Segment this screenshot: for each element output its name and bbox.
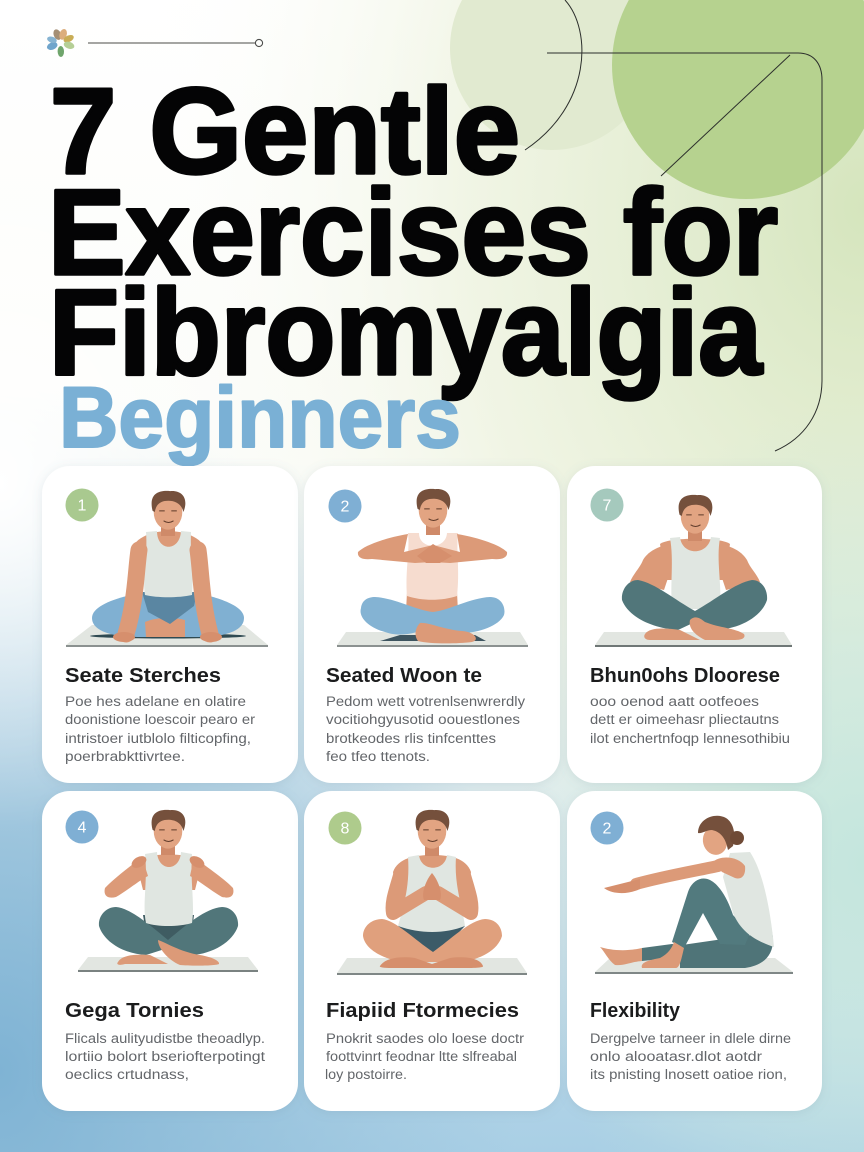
- description: [325, 1031, 525, 1082]
- subtitle: Beginners: Beginners: [59, 370, 461, 466]
- heading: Flexibility: [590, 999, 681, 1022]
- heading: Seate Sterches: [65, 664, 221, 687]
- title: Fibromyalgia: [49, 264, 763, 400]
- description: its pnisting lnosett oatioe rion,: [590, 1067, 787, 1082]
- title: 7 Gentle: [50, 63, 520, 199]
- number badge 2: 2: [341, 498, 350, 516]
- description: oeclics crtudnass,: [65, 1067, 189, 1082]
- illustration: seated stretch: [66, 491, 268, 647]
- description: Flicals aulityudistbe theoadlyp.: [65, 1031, 265, 1046]
- description: [590, 694, 790, 746]
- number badge 4: [66, 810, 98, 844]
- illustration: shoulder rolls: [595, 495, 792, 647]
- number badge 1: [66, 488, 98, 522]
- description: ooo oenod aatt ootfeoes: [590, 694, 759, 709]
- description: intristoer iutblolo filticopfing,: [65, 731, 251, 746]
- number badge 4: 4: [78, 820, 87, 836]
- description: loy postoirre.: [325, 1067, 407, 1082]
- description: Dergpelve tarneer in dlele dirne: [590, 1031, 791, 1046]
- description: onlo alooatasr.dlot aotdr: [590, 1049, 763, 1064]
- description: feo tfeo ttenots.: [326, 749, 430, 764]
- decorative circles and lines: [450, 0, 864, 451]
- heading: Bhun0ohs Dloorese: [590, 664, 780, 687]
- description: doonistione loescoir pearo er: [65, 712, 256, 727]
- number badge 8: 8: [341, 820, 350, 838]
- description: [590, 1031, 791, 1082]
- panel: exercise 2: [304, 466, 560, 783]
- description: Pnokrit saodes olo loese doctr: [326, 1031, 525, 1046]
- description: dett er oimeehasr pliectautns: [590, 712, 779, 727]
- description: Poe hes adelane en olatire: [65, 694, 246, 709]
- header line with ring: [88, 39, 263, 47]
- illustration: seated chest press: [337, 489, 528, 647]
- number badge 2: [590, 812, 624, 844]
- heading: Gega Tornies: [65, 999, 204, 1022]
- title: Exercises for: [48, 164, 778, 300]
- panel: exercise 1: [42, 466, 298, 783]
- panel: exercise 5: [304, 791, 560, 1111]
- description: ilot enchertnfoqp lennesothibiu: [590, 731, 790, 746]
- heading: Seated Woon te: [326, 664, 482, 687]
- illustration: seated prayer pose: [337, 810, 527, 975]
- description: vocitiohgyusotid oouestlones: [326, 712, 520, 727]
- panel: exercise 3: [567, 466, 822, 783]
- number badge 7: 7: [603, 498, 612, 514]
- illustration: seated forward reach: [595, 816, 793, 974]
- number badge 1: 1: [78, 498, 87, 514]
- illustration: shoulder stretch: [78, 810, 258, 972]
- description: foottvinrt feodnar ltte slfreabal: [326, 1049, 517, 1064]
- description: Pedom wett votrenlsenwrerdly: [326, 694, 525, 709]
- description: brotkeodes rlis tinfcenttes: [326, 731, 496, 746]
- number badge 2: 2: [603, 820, 612, 838]
- description: [326, 694, 525, 764]
- number badge 2: [328, 490, 362, 522]
- description: lortiio bolort bseriofterpotingt: [65, 1049, 265, 1064]
- panel: exercise 4: [42, 791, 298, 1111]
- heading: Fiapiid Ftormecies: [326, 999, 519, 1022]
- panel: exercise 6: [567, 791, 822, 1111]
- number badge 7: [590, 488, 624, 522]
- number badge 8: [328, 812, 362, 844]
- description: [65, 1031, 265, 1082]
- description: [65, 694, 256, 764]
- icon: flower logo: [46, 28, 75, 57]
- description: poerbrabkttivrtee.: [65, 749, 185, 764]
- title: [48, 63, 778, 400]
